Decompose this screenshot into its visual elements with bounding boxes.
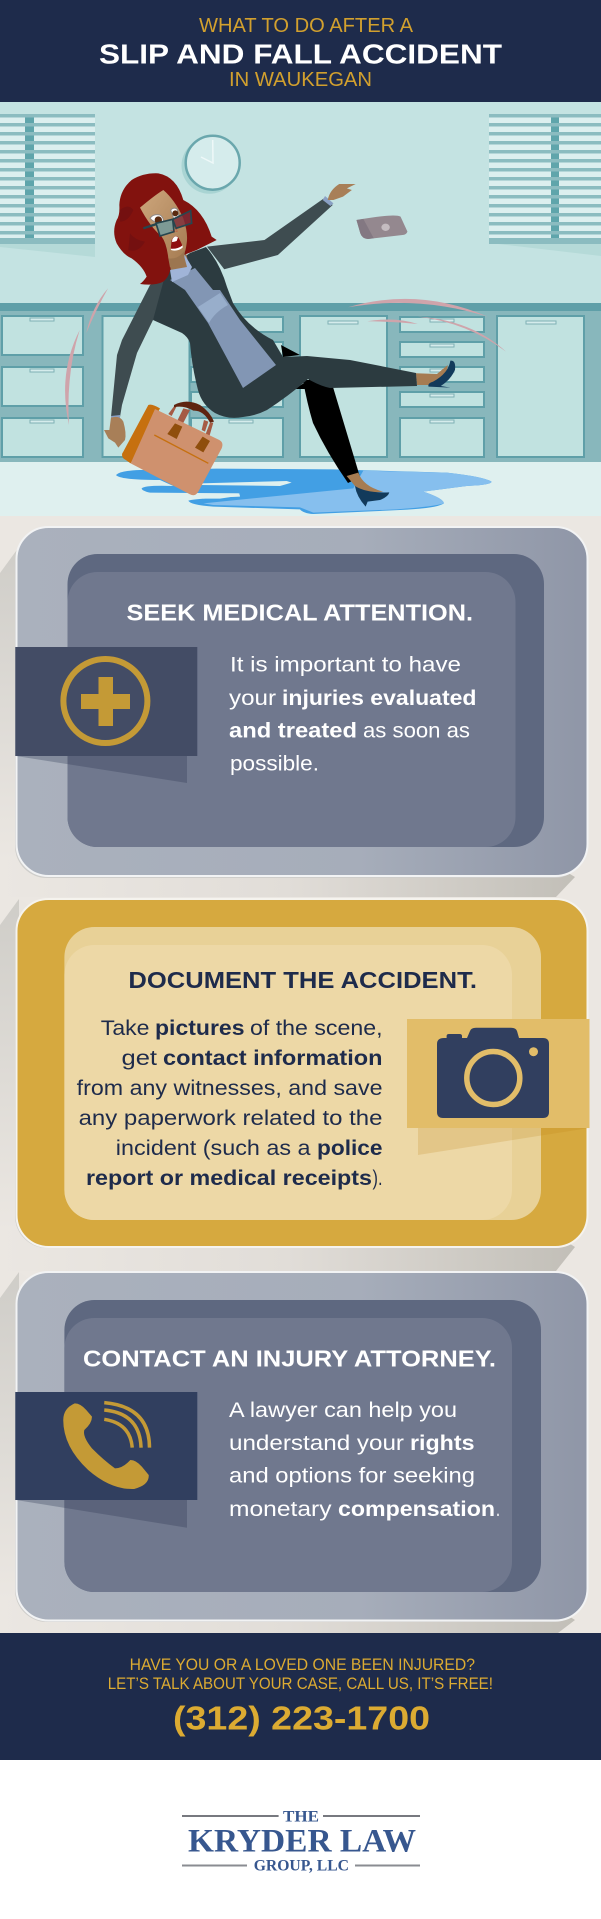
body text: monetary xyxy=(229,1498,332,1521)
body text: compensation xyxy=(338,1498,495,1521)
header title: IN WAUKEGAN xyxy=(229,69,372,91)
right window blinds xyxy=(489,114,601,256)
body text: get xyxy=(122,1047,157,1070)
header title xyxy=(0,0,601,102)
card 2: document the accident xyxy=(0,899,590,1271)
briefcase xyxy=(122,402,222,495)
flying phone xyxy=(356,216,407,239)
cabinets xyxy=(0,303,601,462)
lower arm and hand xyxy=(111,281,165,417)
jacket and trousers xyxy=(153,247,417,418)
icon: medical cross xyxy=(15,647,197,756)
body text: It is important to have xyxy=(230,654,461,677)
motion swooshes xyxy=(65,288,506,425)
illustration: woman slipping in office xyxy=(0,102,601,516)
body text xyxy=(229,1399,500,1521)
collar xyxy=(170,252,192,282)
body text: ). xyxy=(372,1167,382,1190)
logo: the Kryder Law Group: THE xyxy=(283,1809,319,1826)
body text: . xyxy=(496,1498,500,1521)
body text: injuries evaluated xyxy=(282,687,476,710)
body text: police xyxy=(317,1137,382,1160)
ribbon shadow xyxy=(16,1500,187,1528)
body text: possible. xyxy=(230,753,319,776)
icon: camera xyxy=(407,1019,590,1128)
header title: SLIP AND FALL ACCIDENT xyxy=(99,38,502,69)
logo: the Kryder Law Group: GROUP, LLC xyxy=(254,1858,349,1875)
shirt xyxy=(170,268,276,388)
wall clock xyxy=(182,136,240,194)
logo: the Kryder Law Group: KRYDER LAW xyxy=(188,1824,416,1860)
footer call to action: (312) 223-1700 xyxy=(173,1699,430,1736)
back leg xyxy=(303,380,360,483)
heading: SEEK MEDICAL ATTENTION. xyxy=(126,600,473,626)
raised arm xyxy=(207,184,356,269)
body text: Take xyxy=(101,1017,150,1040)
body text: incident (such as a xyxy=(116,1137,311,1160)
body text: and treated xyxy=(229,720,357,743)
woman figure xyxy=(104,173,455,507)
neck xyxy=(168,240,190,276)
body text: A lawyer can help you xyxy=(229,1399,457,1422)
card 3: contact an injury attorney xyxy=(0,1272,588,1633)
body text: your xyxy=(229,687,276,710)
body text: report or medical receipts xyxy=(86,1167,372,1190)
body text xyxy=(229,654,476,776)
mouth xyxy=(171,236,183,250)
body text: any paperwork related to the xyxy=(79,1107,382,1130)
face xyxy=(140,190,187,260)
ribbon shadow xyxy=(16,756,187,783)
logo: the Kryder Law Group xyxy=(182,1809,420,1875)
heading: CONTACT AN INJURY ATTORNEY. xyxy=(83,1346,496,1372)
body text: pictures xyxy=(155,1017,244,1040)
heading: DOCUMENT THE ACCIDENT. xyxy=(128,967,477,993)
body text xyxy=(77,1017,382,1190)
footer call to action xyxy=(0,1633,601,1760)
body text: and options for seeking xyxy=(229,1465,475,1488)
head xyxy=(114,173,217,285)
footer call to action: LET’S TALK ABOUT YOUR CASE, CALL US, IT’S FREE! xyxy=(108,1675,493,1693)
body text: contact information xyxy=(163,1047,382,1070)
hair xyxy=(114,173,217,285)
back foot and shoe xyxy=(347,473,389,507)
body text: of the scene, xyxy=(250,1017,382,1040)
body text: as soon as xyxy=(363,720,470,743)
footer call to action: HAVE YOU OR A LOVED ONE BEEN INJURED? xyxy=(130,1656,475,1674)
glasses xyxy=(156,219,174,236)
page background xyxy=(0,516,601,1633)
header title: WHAT TO DO AFTER A xyxy=(199,15,414,37)
body text: from any witnesses, and save xyxy=(77,1077,382,1100)
ribbon shadow xyxy=(418,1128,589,1155)
eyes xyxy=(150,215,163,223)
card 1: seek medical attention xyxy=(0,527,588,897)
front foot and shoe xyxy=(416,361,455,388)
body text: rights xyxy=(410,1432,474,1455)
icon: telephone xyxy=(15,1392,197,1500)
body text: understand your xyxy=(229,1432,404,1455)
left window blinds xyxy=(0,114,95,257)
water puddle xyxy=(116,469,492,514)
